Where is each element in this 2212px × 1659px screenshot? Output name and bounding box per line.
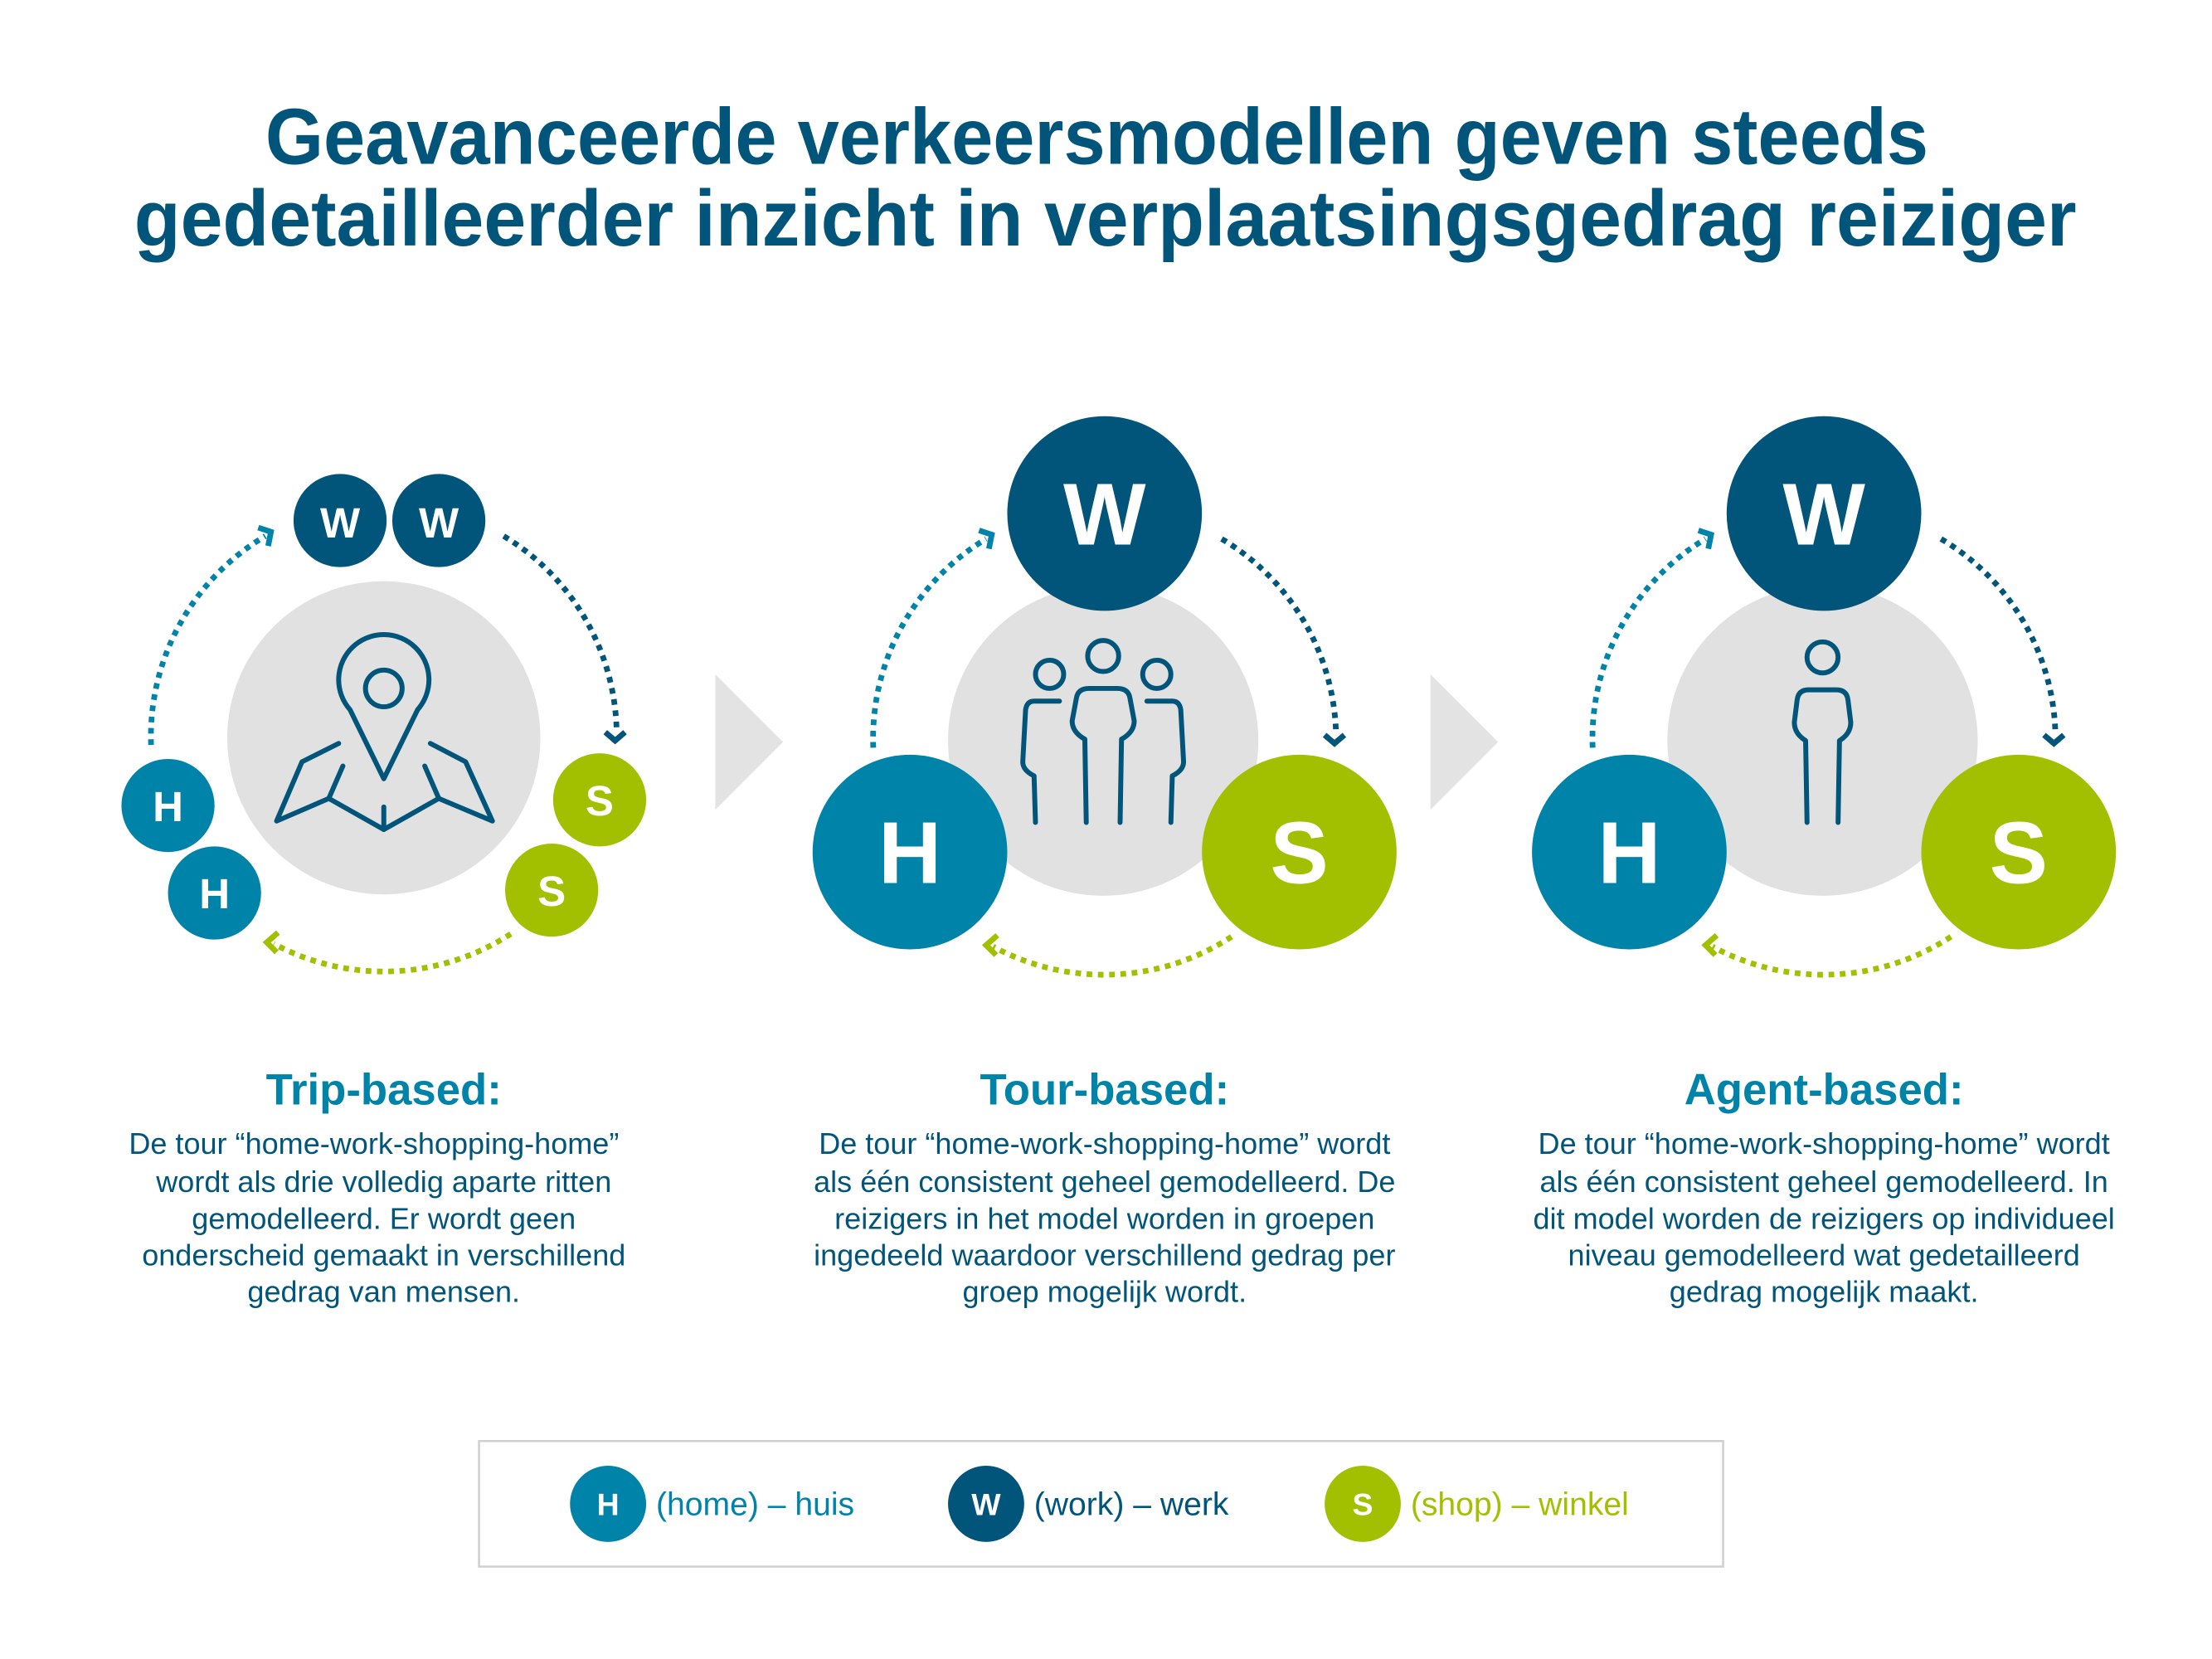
text block: agent-based: als één consistent geheel gemodelleerd. In xyxy=(1539,1165,2108,1199)
text block: trip-based: De tour “home-work-shopping-home” xyxy=(129,1126,619,1160)
text block: tour-based: reizigers in het model worden in groepen xyxy=(834,1201,1374,1235)
panel: agent-based diagram: H xyxy=(1597,805,1661,902)
text block: trip-based: gedrag van mensen. xyxy=(247,1275,520,1309)
text block: trip-based: wordt als drie volledig aparte ritten xyxy=(155,1165,611,1199)
letter circles: S xyxy=(586,777,614,825)
legend xyxy=(479,1441,1723,1567)
letter circles: S xyxy=(537,868,566,915)
text block: agent-based: gedrag mogelijk maakt. xyxy=(1670,1275,1978,1309)
letter circles: W xyxy=(320,499,361,547)
text block: agent-based: De tour “home-work-shopping-home” wordt xyxy=(1539,1126,2110,1160)
icon: single person xyxy=(1794,642,1850,822)
legend item: home: H xyxy=(597,1487,620,1522)
title: gedetailleerder inzicht in verplaatsingsgedrag reiziger xyxy=(134,175,2077,263)
panel: tour-based diagram: W xyxy=(1063,466,1146,563)
center gray circle xyxy=(227,581,541,894)
title xyxy=(134,93,2077,263)
dotted arrow: shop to home xyxy=(267,932,511,971)
legend item: home xyxy=(570,1466,854,1542)
legend item: work: (work) – werk xyxy=(1034,1487,1229,1523)
letter circles: W xyxy=(419,499,459,547)
letter circles: H xyxy=(153,783,183,830)
text block: trip-based: Trip-based: xyxy=(266,1066,502,1115)
legend item: shop xyxy=(1325,1466,1629,1542)
text block: trip-based: gemodelleerd. Er wordt geen xyxy=(192,1201,576,1235)
letter circles: H xyxy=(199,870,230,917)
dotted arrow: work to shop xyxy=(503,536,625,741)
panel: agent-based diagram: W xyxy=(1782,466,1865,563)
title: Geavanceerde verkeersmodellen geven steeds xyxy=(265,93,1928,181)
panel: tour-based diagram: S xyxy=(1270,805,1329,902)
legend item: shop: S xyxy=(1353,1487,1373,1522)
text block: tour-based: als één consistent geheel gemodelleerd. De xyxy=(814,1165,1395,1199)
legend item: home: (home) – huis xyxy=(656,1487,854,1523)
arrow: gray chevron 2 xyxy=(1431,674,1498,810)
panel: tour-based diagram xyxy=(813,416,1397,975)
letter circles xyxy=(121,474,646,940)
text block: trip-based: onderscheid gemaakt in verschillend xyxy=(142,1238,625,1272)
panel: agent-based diagram: S xyxy=(1990,805,2048,902)
text block: tour-based: Tour-based: xyxy=(980,1066,1229,1115)
icon: group of people xyxy=(1023,640,1184,822)
dotted arrow: home to work xyxy=(151,528,271,745)
legend item: work xyxy=(948,1466,1229,1542)
text block: agent-based: dit model worden de reizigers op individueel xyxy=(1533,1201,2115,1235)
panel: agent-based diagram xyxy=(1532,416,2116,975)
text block: agent-based: niveau gemodelleerd wat gedetailleerd xyxy=(1568,1238,2080,1272)
legend item: work: W xyxy=(971,1487,1001,1522)
icon: map pin xyxy=(277,635,493,830)
text block: tour-based xyxy=(814,1066,1395,1309)
legend item: shop: (shop) – winkel xyxy=(1411,1487,1629,1523)
text block: tour-based: groep mogelijk wordt. xyxy=(962,1275,1247,1309)
text block: trip-based xyxy=(129,1066,625,1309)
panel: tour-based diagram: H xyxy=(878,805,941,902)
text block: agent-based xyxy=(1533,1066,2115,1309)
text block: agent-based: Agent-based: xyxy=(1685,1066,1964,1115)
panel: trip-based diagram xyxy=(121,474,646,971)
text block: tour-based: De tour “home-work-shopping-home” wordt xyxy=(819,1126,1390,1160)
text block: tour-based: ingedeeld waardoor verschillend gedrag per xyxy=(814,1238,1395,1272)
arrow: gray chevron 1 xyxy=(715,674,783,810)
